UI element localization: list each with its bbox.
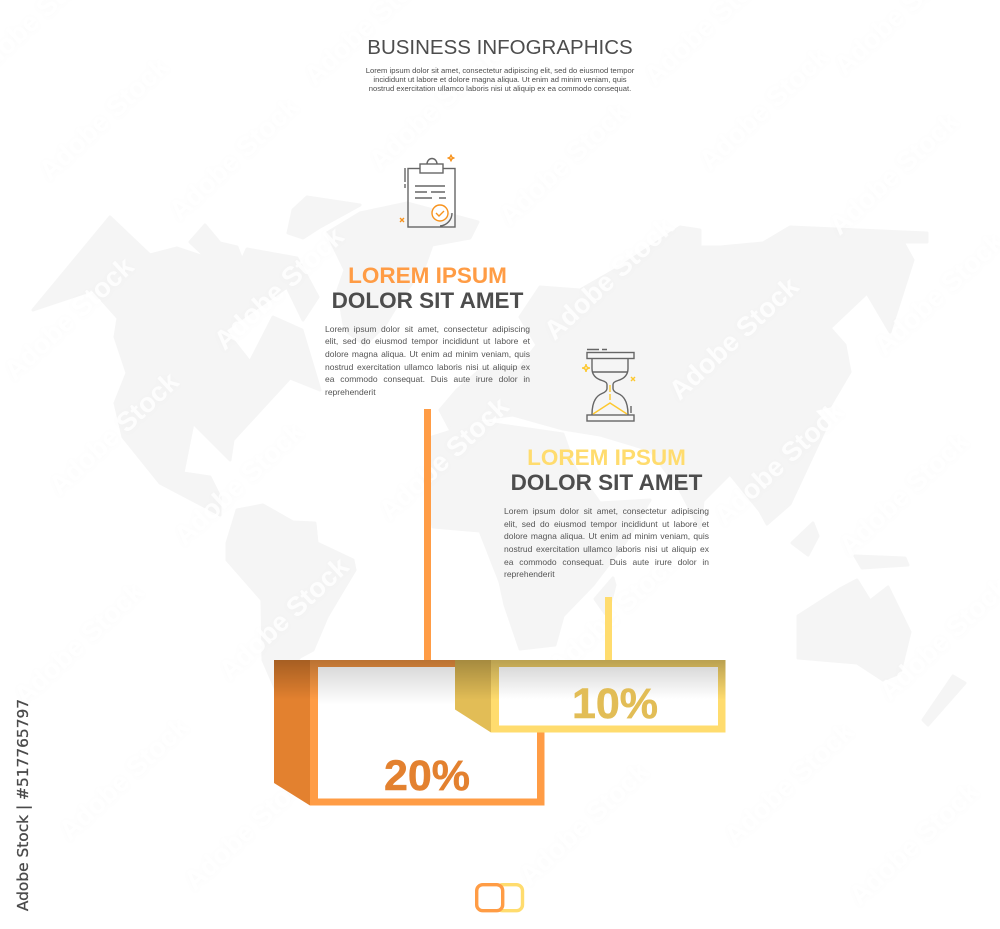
box: 20%: 20%: [384, 752, 470, 800]
watermark: Adobe Stock: [373, 391, 515, 526]
text block two: nostrud exercitation ullamco laboris nisi ut aliquip ex: [504, 544, 709, 554]
heading: block two: LOREM IPSUM: [527, 445, 686, 470]
watermark: Adobe Stock: [513, 756, 655, 891]
watermark: Adobe Stock: [53, 711, 195, 846]
text block one: nostrud exercitation ullamco laboris nisi ut aliquip ex: [325, 362, 530, 372]
connector: orange: [424, 409, 431, 661]
text block two: dolore magna aliqua. Ut enim ad minim veniam, quis: [504, 531, 709, 541]
watermark: Adobe Stock: [213, 551, 355, 686]
watermark: Adobe Stock: [43, 366, 185, 501]
bars: percentage boxes: [274, 158, 726, 806]
text block one: [325, 324, 530, 397]
watermark: Adobe Stock: [208, 221, 350, 356]
watermark: Adobe Stock: [538, 211, 680, 346]
text block two: [504, 506, 709, 579]
watermark: Adobe Stock: [543, 546, 685, 681]
box: 10%: 10%: [572, 680, 658, 728]
text block one: reprehenderit: [325, 387, 376, 397]
title: BUSINESS INFOGRAPHICS: [367, 36, 633, 59]
box: 10%: [455, 660, 726, 732]
watermark: Adobe Stock: [708, 396, 850, 531]
intro text: nostrud exercitation ullamco laboris nisi ut aliquip ex ea commodo consequat.: [369, 84, 631, 93]
text block two: reprehenderit: [504, 569, 555, 579]
text block two: elit, sed do eiusmod tempor incididunt ut labore et: [504, 519, 709, 529]
text block one: dolore magna aliqua. Ut enim ad minim veniam, quis: [325, 349, 530, 359]
stock credit: Adobe Stock | #517765797: [14, 699, 32, 911]
intro text: [366, 66, 634, 93]
text block one: ea commodo consequat. Duis aute irure dolor in: [325, 374, 530, 384]
watermark: Adobe Stock: [823, 106, 965, 241]
icon: hourglass: [582, 348, 636, 422]
heading: block one: DOLOR SIT AMET: [332, 288, 523, 313]
intro text: Lorem ipsum dolor sit amet, consectetur adipiscing elit, sed do eiusmod tempor: [366, 66, 634, 75]
watermark: Adobe Stock: [693, 41, 835, 176]
watermark: Adobe Stock: [833, 426, 975, 561]
watermark: Adobe Stock: [163, 91, 305, 226]
watermark: Adobe Stock: [843, 776, 985, 911]
watermark: Adobe Stock: [718, 716, 860, 851]
connector: yellow: [605, 597, 612, 661]
text block one: elit, sed do eiusmod tempor incididunt ut labore et: [325, 336, 530, 346]
text block two: ea commodo consequat. Duis aute irure dolor in: [504, 557, 709, 567]
watermark: Adobe Stock: [663, 271, 805, 406]
icon: linked squares: [475, 883, 524, 912]
text block two: Lorem ipsum dolor sit amet, consectetur adipiscing: [504, 506, 709, 516]
watermark: Adobe Stock: [33, 51, 175, 186]
heading: block one: [332, 263, 524, 313]
watermark: Adobe Stock: [0, 251, 140, 386]
watermark: Adobe Stock: [168, 416, 310, 551]
heading: block two: [511, 445, 702, 495]
heading: block one: LOREM IPSUM: [348, 263, 507, 288]
icon: clipboard: [400, 154, 628, 412]
watermark: Adobe Stock: [363, 41, 505, 176]
text block one: Lorem ipsum dolor sit amet, consectetur adipiscing: [325, 324, 530, 334]
heading: block two: DOLOR SIT AMET: [511, 470, 702, 495]
watermark: Adobe Stock: [178, 761, 320, 896]
intro text: incididunt ut labore et dolore magna aliqua. Ut enim ad minim veniam, quis: [373, 75, 627, 84]
watermark: Adobe Stock: [493, 96, 635, 231]
box: 20%: [274, 660, 544, 806]
watermark: Adobe Stock: [8, 576, 150, 711]
